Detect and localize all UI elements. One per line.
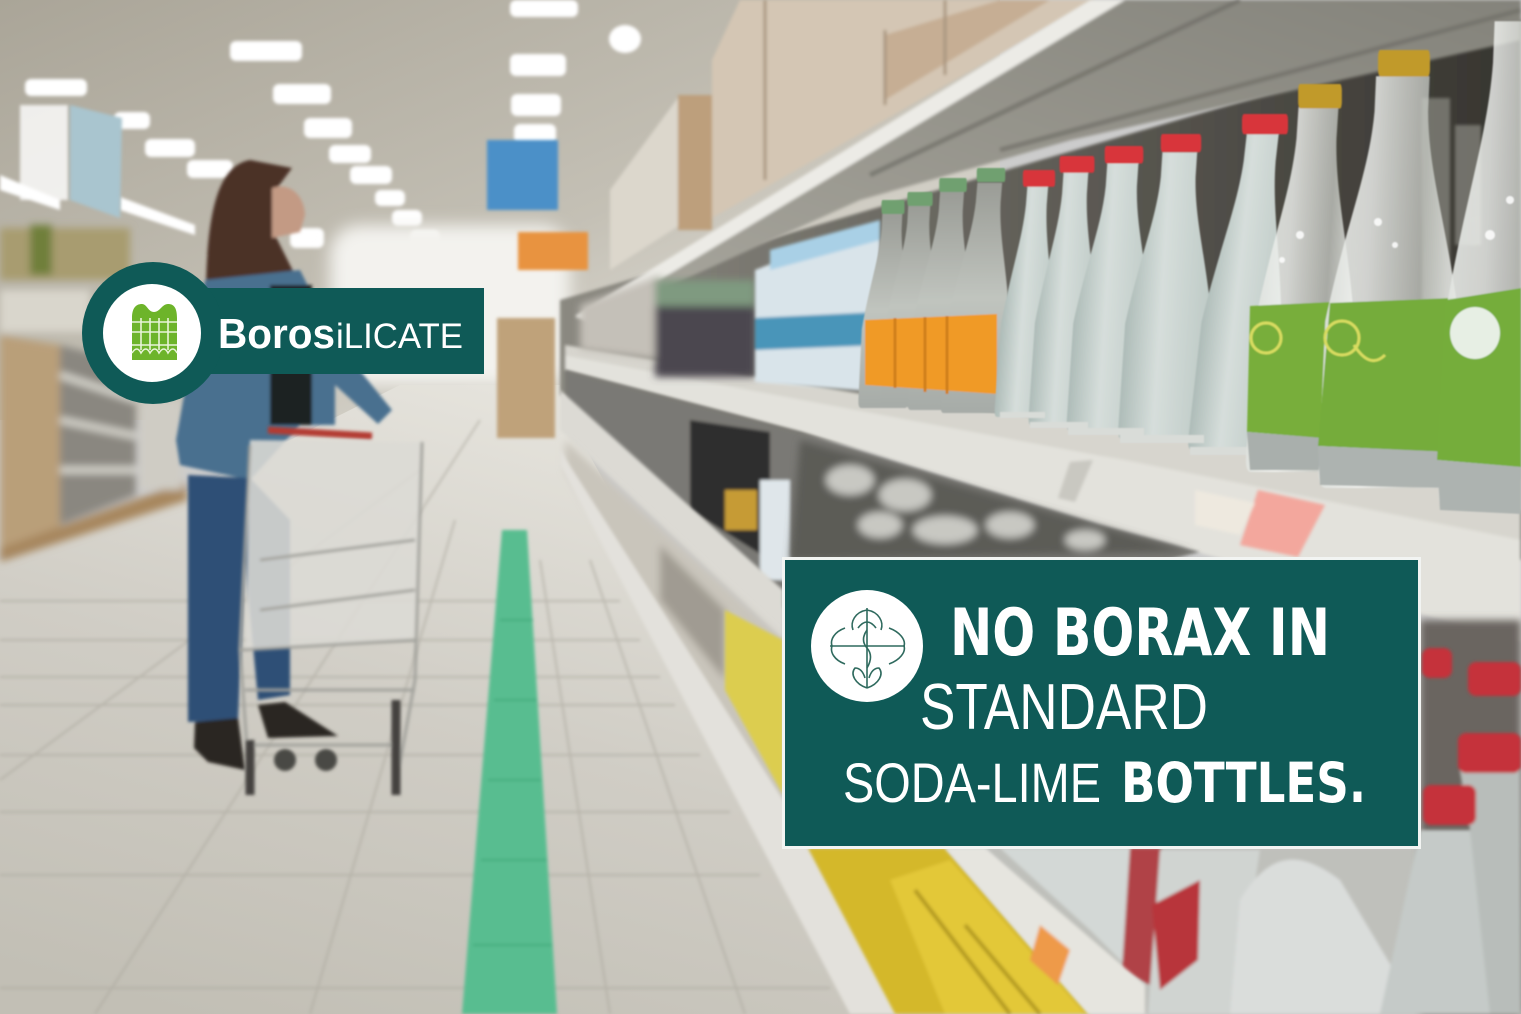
sign heading line 1: NO BORAX IN (950, 596, 1330, 671)
floor (0, 385, 900, 1014)
right shelving: back wall behind bottles (560, 20, 1521, 560)
grey shelves (60, 345, 136, 525)
top shelf: white edge and underside (575, 0, 1521, 322)
yellow boxes (808, 848, 1090, 1014)
badge: Borosilicate (82, 262, 484, 404)
lower shelf area (565, 370, 1200, 650)
white icon disc (103, 284, 201, 382)
jeans (188, 475, 290, 722)
icon: botanical cross (830, 608, 905, 688)
dark rear goods (565, 370, 1200, 650)
background: ceiling (0, 0, 1000, 420)
bottom shelf white edge (560, 450, 900, 1014)
bottle 1 (1245, 84, 1368, 472)
red caps (1023, 114, 1288, 187)
icon: green borosilicate lattice (132, 304, 177, 360)
clear plastic bottles, lower right (985, 620, 1521, 1014)
second shelf edge (560, 390, 783, 640)
blue aisle sign (487, 140, 558, 210)
left shelving (0, 225, 188, 562)
white icon disc (811, 590, 923, 702)
badge circle (82, 262, 224, 404)
dim rear bottles (1422, 98, 1481, 328)
bottle 3 (1437, 21, 1521, 514)
ceiling lights (0, 0, 641, 284)
main shelf surface and front strip (565, 345, 1521, 642)
red caps lower right (1422, 648, 1521, 825)
yellow goods on lower shelf (725, 610, 783, 795)
badge text: Boros (218, 310, 335, 357)
top shelf boxes (610, 0, 1096, 270)
white shelf band (0, 290, 90, 332)
sign line 3: SODA-LIME (843, 751, 1101, 814)
person with shopping cart (176, 160, 422, 795)
shelf price labels (1058, 460, 1325, 557)
hanging signs (70, 105, 588, 270)
hair (206, 160, 300, 292)
floor tile lines (0, 420, 830, 1014)
top goods (0, 228, 130, 280)
blue and white water bottles (755, 220, 880, 392)
small white tag (1195, 490, 1255, 535)
bottle 2 (1318, 50, 1470, 488)
blue banner left (70, 105, 122, 218)
green floor strip (462, 530, 557, 1014)
bottle glass bases (1000, 412, 1260, 455)
frosted white bottles with red caps (994, 114, 1303, 455)
green caps (882, 168, 1005, 214)
shopping cart (240, 430, 422, 795)
orange labels (865, 314, 997, 394)
silver bottle row (790, 440, 1190, 560)
badge banner (150, 288, 484, 374)
badge: Borosilicate: iLICATE (336, 317, 463, 356)
lower left shelf goods (565, 440, 783, 830)
aisle end glow (330, 225, 570, 385)
distant shelf goods (580, 275, 755, 377)
orange aisle sign (518, 232, 588, 270)
shoes (194, 718, 245, 770)
sign line 3 bold: BOTTLES. (1121, 751, 1366, 815)
back aisle boxes (497, 318, 555, 438)
jacket (176, 270, 392, 480)
top (270, 285, 312, 425)
sign panel (784, 558, 1420, 848)
clear bottles with green labels (1245, 21, 1521, 514)
cardboard boxes (0, 335, 60, 555)
orange-label bottles with green caps (858, 168, 1021, 413)
bottom shelf strip with orange tag (945, 848, 1145, 1014)
glass highlights (1279, 196, 1514, 263)
sign: no borax (784, 558, 1420, 848)
pink price tag (1240, 490, 1325, 557)
face (272, 187, 305, 238)
sign line 2: STANDARD (920, 670, 1208, 743)
